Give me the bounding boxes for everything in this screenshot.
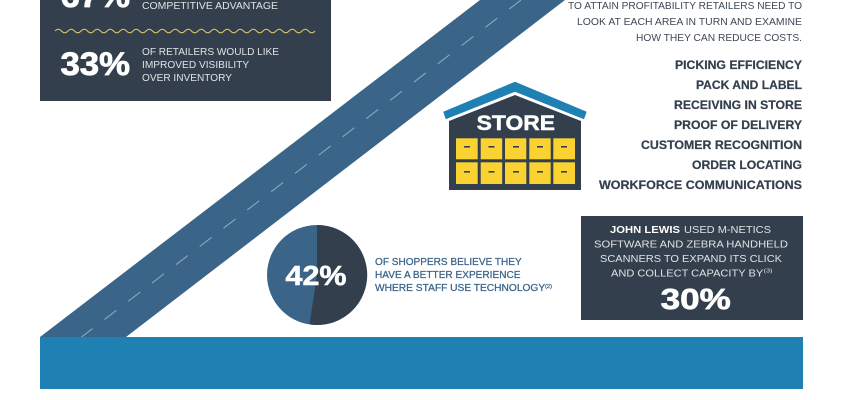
text: visibility over inventory: OVER INVENTORY <box>142 73 232 84</box>
callout: John Lewis: SOFTWARE AND ZEBRA HANDHELD <box>594 238 788 250</box>
callout: John Lewis: (3) <box>764 268 773 274</box>
road <box>40 0 565 338</box>
text: shoppers experience: HAVE A BETTER EXPERIENCE <box>375 270 521 281</box>
list: cost areas: PACK AND LABEL <box>696 80 802 92</box>
text: shoppers experience: (2) <box>545 284 552 290</box>
list: cost areas: PICKING EFFICIENCY <box>675 60 802 72</box>
list: cost areas: PROOF OF DELIVERY <box>674 120 802 132</box>
text: shoppers experience: WHERE STAFF USE TECHNOLOGY <box>375 283 546 294</box>
callout: John Lewis <box>581 216 803 320</box>
text: visibility over inventory: IMPROVED VISIBILITY <box>142 60 250 71</box>
stat: 33 percent: 33% <box>60 46 130 82</box>
text: reduce costs intro: HOW THEY CAN REDUCE COSTS. <box>636 32 802 44</box>
callout: John Lewis: SCANNERS TO EXPAND ITS CLICK <box>600 253 782 265</box>
panel: retailer statistics <box>40 0 331 101</box>
pie chart: 42 percent: 42% <box>286 260 347 291</box>
callout: John Lewis: JOHN LEWIS <box>610 224 680 236</box>
text: reduce costs intro: LOOK AT EACH AREA IN TURN AND EXAMINE <box>577 16 802 28</box>
text: visibility over inventory: OF RETAILERS WOULD LIKE <box>142 47 279 58</box>
list: cost areas: WORKFORCE COMMUNICATIONS <box>599 180 802 192</box>
text: competitive advantage: COMPETITIVE ADVANTAGE <box>142 1 278 12</box>
list: cost areas: CUSTOMER RECOGNITION <box>641 140 802 152</box>
list: cost areas: ORDER LOCATING <box>692 160 802 172</box>
pie chart: 42 percent <box>267 225 367 325</box>
ground band <box>40 337 803 389</box>
icon: store <box>443 82 587 190</box>
text: shoppers experience: OF SHOPPERS BELIEVE THEY <box>375 257 522 268</box>
callout: John Lewis: USED M-NETICS <box>684 224 771 236</box>
text: reduce costs intro: TO ATTAIN PROFITABILITY RETAILERS NEED TO <box>568 0 802 12</box>
stat: 30 percent: 30% <box>661 284 731 316</box>
list: cost areas: RECEIVING IN STORE <box>674 100 802 112</box>
label: store: STORE <box>477 112 555 135</box>
callout: John Lewis: AND COLLECT CAPACITY BY <box>611 268 763 280</box>
list: cost areas <box>599 60 802 192</box>
